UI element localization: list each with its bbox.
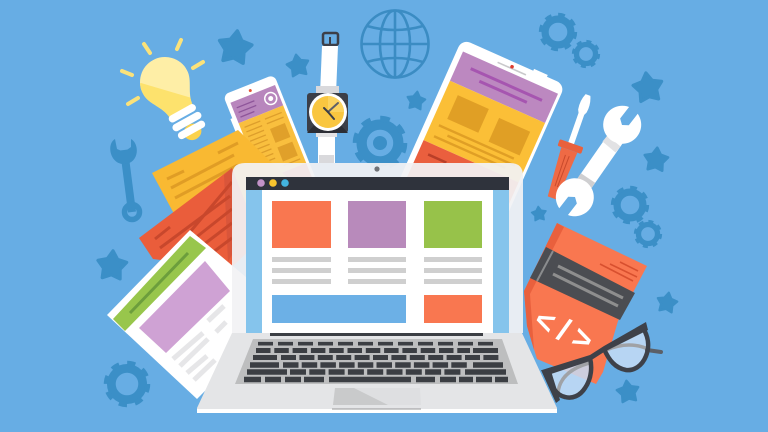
screen [246,190,509,333]
eyeglasses [541,322,661,403]
laptop base [197,333,557,413]
white document [107,230,285,399]
icon: gears [106,15,661,405]
small phone [221,75,317,203]
book [524,223,647,384]
window buttons [257,179,289,187]
laptop [197,163,557,413]
keyboard [235,339,518,384]
touchpad [332,388,421,409]
icon: light bulb [120,38,206,140]
code symbol: </> [529,301,605,362]
icon: blue wrench [110,139,140,220]
icon: stars [97,29,679,403]
laptop lid [232,163,523,333]
webcam [374,166,380,172]
tablet [397,37,566,231]
wristwatch [307,33,348,163]
white wrench [549,99,648,223]
browser title bar [246,177,509,190]
icon: globe [362,10,428,78]
illustration: laptop surrounded by web design objects [96,9,678,413]
text lines [272,257,482,284]
content blocks [272,201,482,323]
yellow document [152,130,300,236]
red document [139,168,260,269]
screwdriver [541,91,600,202]
